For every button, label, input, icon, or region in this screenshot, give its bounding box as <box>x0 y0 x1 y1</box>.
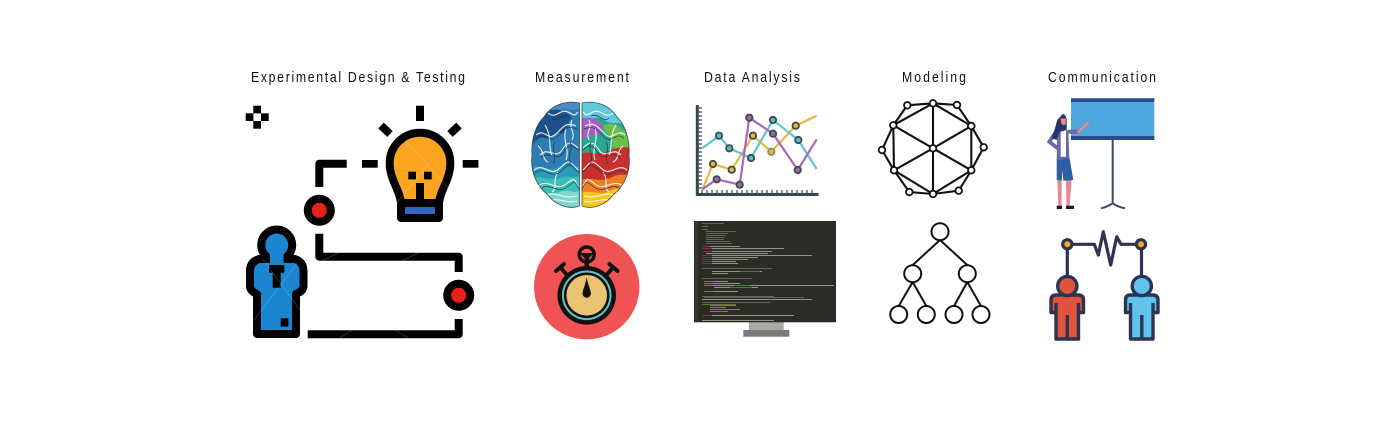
watermark lines <box>254 140 450 338</box>
icon: light bulb <box>362 106 478 218</box>
signal node right <box>1136 240 1146 249</box>
heading: Experimental Design & Testing: Experimental Design & Testing <box>251 69 465 85</box>
monitor screen <box>694 221 836 322</box>
network nodes <box>879 100 987 197</box>
monitor stand <box>743 322 789 337</box>
stopwatch case and dial <box>557 266 616 325</box>
person: blue <box>1126 276 1158 339</box>
chart axes <box>697 105 818 194</box>
icon: woman presenting at a board <box>1049 98 1154 209</box>
icon: two people communicating <box>1051 232 1158 339</box>
code lines <box>695 222 834 321</box>
node: lower red dot <box>447 284 470 307</box>
series: teal line <box>702 117 817 169</box>
arrow: connector between nodes <box>319 234 459 272</box>
heading: Communication: Communication <box>1048 69 1156 85</box>
heading: Measurement: Measurement <box>535 69 629 85</box>
series: purple line <box>702 114 817 189</box>
connector lines <box>1067 250 1142 276</box>
signal node left <box>1063 240 1072 249</box>
infographic canvas <box>246 71 1160 341</box>
woman figure <box>1049 114 1088 209</box>
series: yellow line <box>702 116 817 189</box>
network edges <box>882 103 984 194</box>
icon: colourful brain <box>530 100 631 210</box>
icon: person <box>250 230 304 334</box>
person: red <box>1051 276 1084 339</box>
left hemisphere <box>530 100 580 210</box>
heading: Data Analysis: Data Analysis <box>704 69 800 85</box>
node: upper red dot <box>308 199 331 222</box>
presentation board <box>1071 98 1154 208</box>
icon: tree diagram <box>890 223 990 323</box>
red disc <box>534 234 639 339</box>
arrow: dashed path from node to bulb <box>319 164 347 187</box>
brain fold lines <box>534 111 627 202</box>
icon: experimental design idea flow <box>246 106 478 338</box>
stopwatch crown and buttons <box>556 247 618 275</box>
icon: line chart <box>697 105 818 194</box>
icon: code on a monitor <box>694 221 836 337</box>
arrow: connector from node to person <box>308 319 459 334</box>
icon: network graph <box>879 100 987 197</box>
heading: Modeling: Modeling <box>902 69 966 85</box>
right hemisphere <box>581 100 631 210</box>
icon: small checker diamond <box>246 106 269 129</box>
signal wave between nodes <box>1067 232 1141 265</box>
icon: stopwatch on red circle <box>534 234 639 339</box>
